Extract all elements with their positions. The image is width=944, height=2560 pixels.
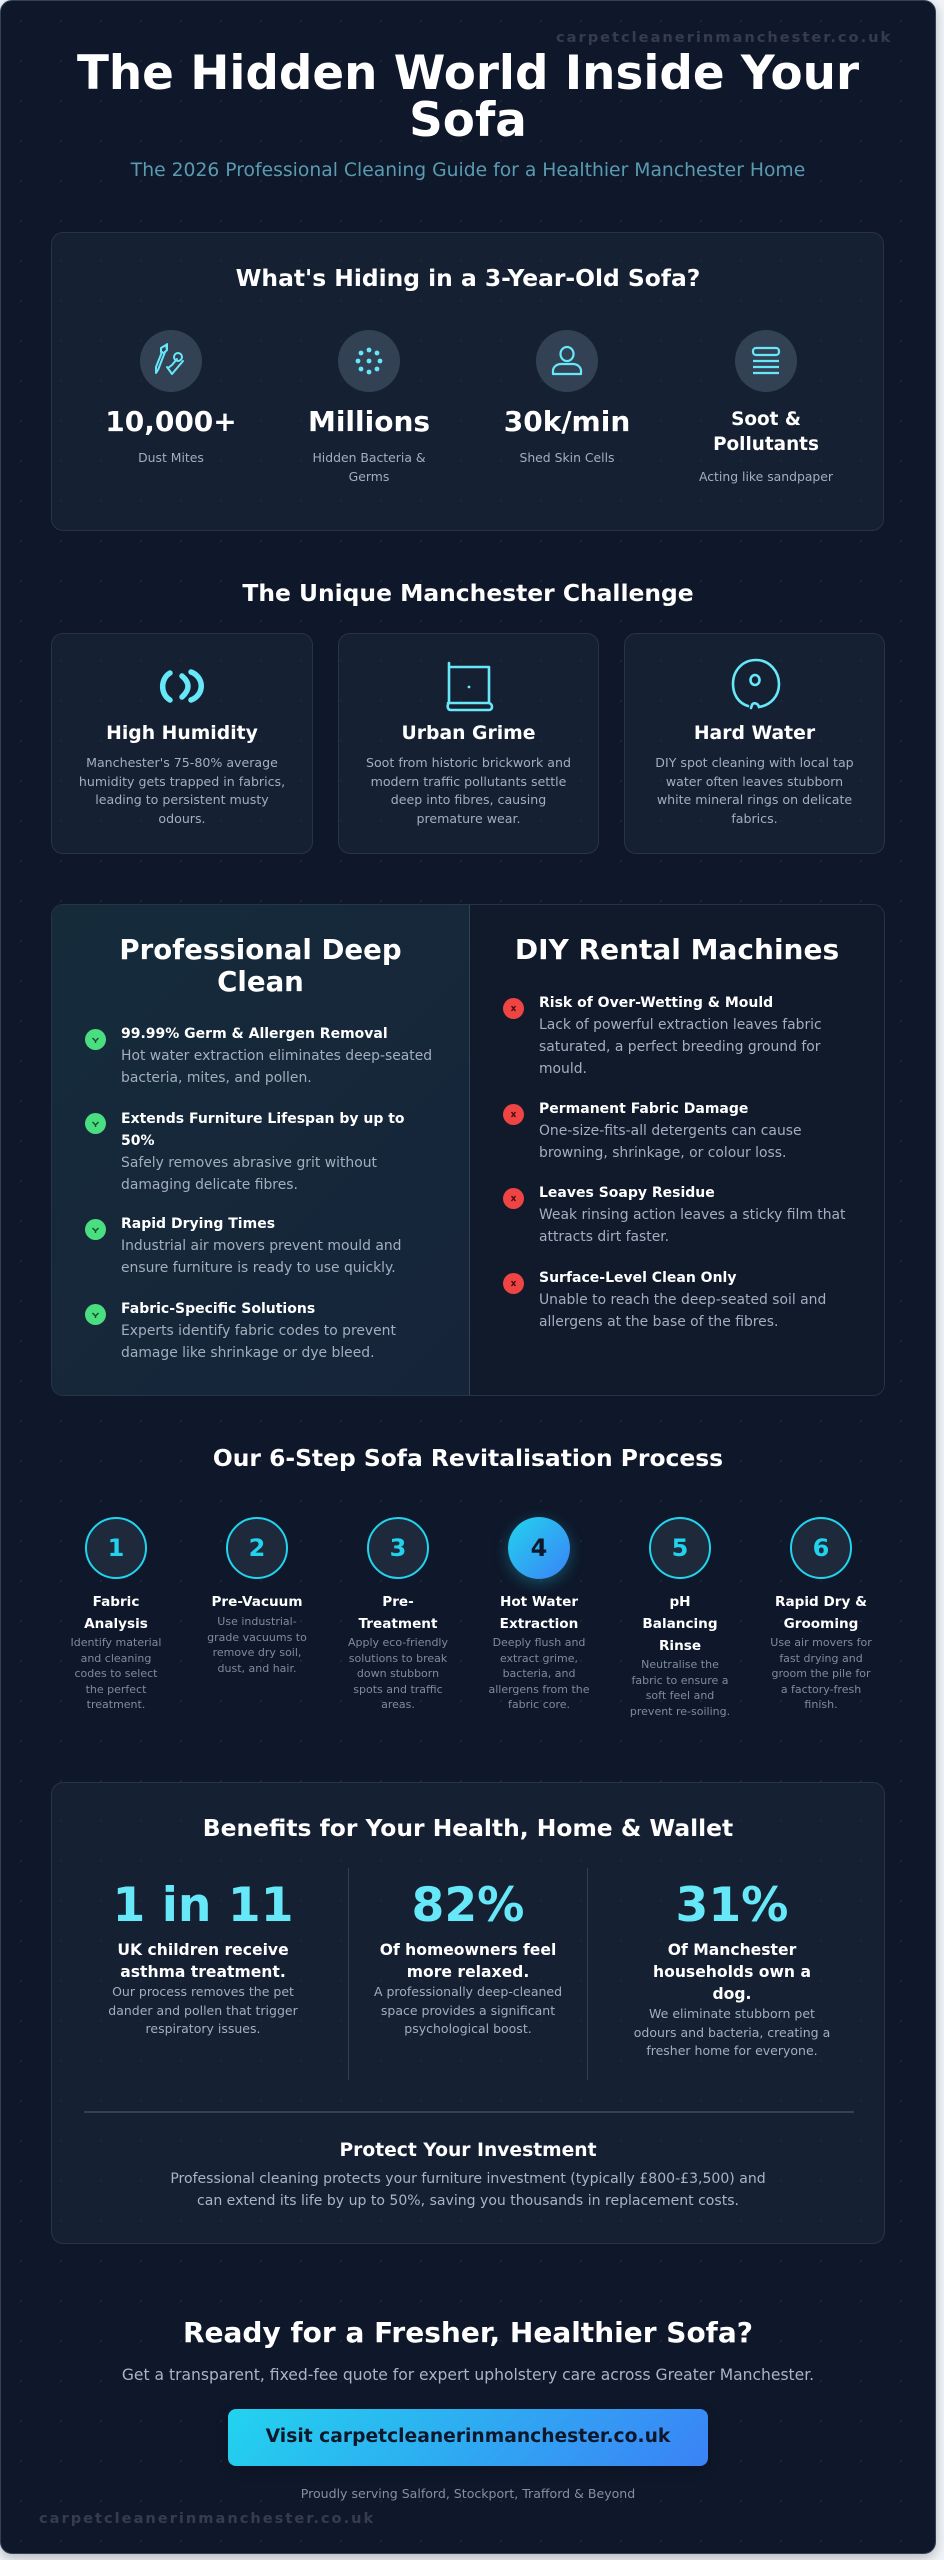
stat text: space provides a significant <box>381 2003 555 2018</box>
step title: Analysis <box>84 1616 148 1632</box>
step text: dust, and hair. <box>218 1662 296 1675</box>
icon: check <box>85 1113 106 1134</box>
stat text <box>83 1983 323 2039</box>
item text: Industrial air movers prevent mould and <box>121 1238 401 1254</box>
paragraph: Professional cleaning protects your furniture investment (typically £800-£3,500) and <box>170 2171 766 2187</box>
stat value: Pollutants <box>713 434 819 455</box>
item text: Hot water extraction eliminates deep-seated <box>121 1048 432 1064</box>
step title <box>46 1592 186 1636</box>
step number <box>649 1517 711 1579</box>
item: fabric-specific <box>85 1301 396 1361</box>
item title: Fabric-Specific Solutions <box>121 1301 315 1317</box>
item title: Extends Furniture Lifespan by up to <box>121 1111 405 1127</box>
step text: fast drying and <box>779 1652 863 1665</box>
step text: Apply eco-friendly <box>348 1636 448 1649</box>
panel: urban grime <box>338 633 599 854</box>
stat text: psychological boost. <box>404 2021 532 2036</box>
step text: and cleaning <box>81 1652 151 1665</box>
item text <box>121 1048 432 1086</box>
panel: high humidity <box>51 633 313 854</box>
step text: Use industrial- <box>217 1615 297 1628</box>
subtitle: The 2026 Professional Cleaning Guide for a Healthier Manchester Home <box>131 160 805 181</box>
item: soapy residue <box>503 1185 846 1245</box>
step title: Rinse <box>659 1638 701 1654</box>
stat text <box>348 1983 588 2039</box>
item text: Weak rinsing action leaves a sticky film that <box>539 1207 846 1223</box>
step text: prevent re-soiling. <box>630 1705 730 1718</box>
step text: bacteria, and <box>503 1667 575 1680</box>
card heading: Hard Water <box>694 723 815 744</box>
step number: 6 <box>813 1534 829 1562</box>
stat label: Hidden Bacteria & <box>312 450 426 465</box>
step title: Hot Water <box>500 1594 578 1610</box>
stat text: fresher home for everyone. <box>646 2043 818 2058</box>
step title: Balancing <box>642 1616 718 1632</box>
item text: mould. <box>539 1061 587 1077</box>
icon: humidity <box>160 669 204 703</box>
icon: layers <box>735 330 797 392</box>
card text: odours. <box>158 811 206 826</box>
heading: manchester challenge: The Unique Manchester Challenge <box>242 579 694 607</box>
stat heading <box>612 1940 852 2005</box>
step text: finish. <box>804 1698 838 1711</box>
watermark: top right: carpetcleanerinmanchester.co.uk <box>556 29 892 46</box>
step title <box>610 1592 750 1657</box>
column heading: Professional Deep <box>119 933 402 966</box>
paragraph: can extend its life by up to 50%, saving you thousands in replacement costs. <box>197 2193 739 2209</box>
step title: pH <box>669 1594 691 1610</box>
subheading: Protect Your Investment <box>339 2140 597 2161</box>
step title: Pre-Vacuum <box>211 1594 303 1610</box>
step title: Rapid Dry & <box>775 1594 867 1610</box>
item: surface clean <box>503 1267 873 1337</box>
step text: codes to select <box>74 1667 157 1680</box>
stat value: 30k/min <box>504 405 630 438</box>
item title: Risk of Over-Wetting & Mould <box>539 995 773 1011</box>
stat value: Soot & <box>731 409 801 430</box>
stat label <box>312 450 426 484</box>
big stat: 1 in 11 <box>112 1878 294 1933</box>
card text: premature wear. <box>416 811 520 826</box>
card text <box>655 755 854 826</box>
heading: benefits: Benefits for Your Health, Home & Wallet <box>203 1814 733 1842</box>
heading: process: Our 6-Step Sofa Revitalisation Process <box>213 1444 723 1472</box>
icon: person <box>536 330 598 392</box>
step text: remove dry soil, <box>213 1646 301 1659</box>
step title: Extraction <box>500 1616 578 1632</box>
item title: 99.99% Germ & Allergen Removal <box>121 1026 388 1042</box>
card heading: High Humidity <box>106 723 258 744</box>
stat label: Dust Mites <box>138 450 204 465</box>
stat text: Our process removes the pet <box>112 1984 294 1999</box>
icon: check <box>85 1219 106 1240</box>
step text: a factory-fresh <box>781 1683 861 1696</box>
card text: Soot from historic brickwork and <box>366 755 571 770</box>
icon: cross <box>503 1104 524 1125</box>
step number: 5 <box>672 1534 688 1562</box>
item text <box>121 1323 396 1361</box>
stat value: Millions <box>308 405 430 438</box>
item text: One-size-fits-all detergents can cause <box>539 1123 802 1139</box>
stat: skin cells <box>504 330 630 465</box>
step 3 <box>328 1517 468 1727</box>
title: The Hidden World Inside Your <box>77 47 859 101</box>
card text: Manchester's 75-80% average <box>86 755 278 770</box>
card text: water often leaves stubborn <box>666 774 843 789</box>
step number: 2 <box>249 1534 265 1562</box>
item text: Unable to reach the deep-seated soil and <box>539 1292 826 1308</box>
step text: the perfect <box>86 1683 146 1696</box>
stat text: We eliminate stubborn pet <box>649 2006 815 2021</box>
stat heading: dog. <box>713 1985 751 2003</box>
step text: extract grime, <box>500 1652 578 1665</box>
item text: damage like shrinkage or dye bleed. <box>121 1345 375 1361</box>
step 6 <box>751 1517 891 1727</box>
step 1 <box>46 1517 186 1727</box>
icon: urban grime <box>446 662 494 712</box>
panel: what's hiding <box>51 232 884 531</box>
step text: Neutralise the <box>641 1658 719 1671</box>
stat value: 10,000+ <box>105 405 237 438</box>
step text <box>46 1635 186 1713</box>
step number <box>367 1517 429 1579</box>
icon: hard water <box>732 658 780 710</box>
stat label: Acting like sandpaper <box>699 469 833 484</box>
step number: 3 <box>390 1534 406 1562</box>
item text: bacteria, mites, and pollen. <box>121 1070 312 1086</box>
step number <box>85 1517 147 1579</box>
panel: hard water <box>624 633 885 854</box>
card text <box>79 755 285 826</box>
watermark: bottom left: carpetcleanerinmanchester.co.uk <box>39 2510 375 2527</box>
icon: cross <box>503 1273 524 1294</box>
step text: areas. <box>381 1698 415 1711</box>
benefit: dog owners <box>612 1868 852 2078</box>
item title: Rapid Drying Times <box>121 1216 275 1232</box>
step 4 <box>469 1517 609 1727</box>
step number highlighted: 4 <box>531 1534 547 1562</box>
item text <box>539 1289 826 1333</box>
step text <box>610 1657 750 1719</box>
step text <box>469 1635 609 1713</box>
stat text: respiratory issues. <box>146 2021 260 2036</box>
item text <box>539 1123 802 1161</box>
stat heading: Of homeowners feel <box>380 1941 556 1959</box>
stat heading: more relaxed. <box>407 1963 529 1981</box>
step text: solutions to break <box>349 1652 447 1665</box>
icon: check <box>85 1304 106 1325</box>
card text: DIY spot cleaning with local tap <box>655 755 854 770</box>
card text: white mineral rings on delicate <box>657 792 852 807</box>
icon: dust mites <box>140 330 202 392</box>
item title: Leaves Soapy Residue <box>539 1185 715 1201</box>
button: Visit carpetcleanerinmanchester.co.uk <box>266 2426 670 2447</box>
step title: Pre- <box>382 1594 414 1610</box>
item title: 50% <box>121 1133 155 1149</box>
column: DIY rental machines <box>470 905 884 1395</box>
item text <box>121 1155 377 1193</box>
stat heading: asthma treatment. <box>120 1963 286 1981</box>
stat: soot and pollutants <box>699 330 833 484</box>
panel: benefits <box>51 1782 885 2244</box>
step text: treatment. <box>87 1698 145 1711</box>
item text: Safely removes abrasive grit without <box>121 1155 377 1171</box>
step number <box>226 1517 288 1579</box>
stat label: Germs <box>349 469 389 484</box>
icon: check <box>85 1029 106 1050</box>
paragraph <box>52 2168 884 2212</box>
step text: allergens from the <box>488 1683 590 1696</box>
icon: cross <box>503 1188 524 1209</box>
item text <box>539 1017 822 1077</box>
stat text: dander and pollen that trigger <box>108 2003 298 2018</box>
item text: Experts identify fabric codes to prevent <box>121 1323 396 1339</box>
step text <box>328 1635 468 1713</box>
step text: down stubborn <box>357 1667 439 1680</box>
step text: grade vacuums to <box>207 1631 307 1644</box>
item text: Lack of powerful extraction leaves fabric <box>539 1017 822 1033</box>
step text: fabric to ensure a <box>632 1674 728 1687</box>
card heading: Urban Grime <box>402 723 535 744</box>
item: drying <box>85 1216 401 1276</box>
step number highlighted <box>508 1517 570 1579</box>
icon: cross <box>503 998 524 1019</box>
call to action heading: Ready for a Fresher, Healthier Sofa? <box>183 2316 753 2349</box>
stat text: odours and bacteria, creating a <box>634 2025 830 2040</box>
step title: Fabric <box>93 1594 139 1610</box>
stat: bacteria <box>308 330 430 484</box>
step text: Identify material <box>71 1636 161 1649</box>
card text: modern traffic pollutants settle <box>371 774 566 789</box>
footer note: Proudly serving Salford, Stockport, Trafford & Beyond <box>301 2486 635 2501</box>
item text <box>121 1238 401 1276</box>
step text <box>187 1614 327 1676</box>
step text: spots and traffic <box>353 1683 443 1696</box>
step text: Deeply flush and <box>493 1636 585 1649</box>
step title: Grooming <box>784 1616 858 1632</box>
heading: what's hiding: What's Hiding in a 3-Year-Old Sofa? <box>236 264 700 292</box>
item text: damaging delicate fibres. <box>121 1177 298 1193</box>
item: over-wetting <box>503 995 822 1077</box>
stat label: Shed Skin Cells <box>519 450 615 465</box>
step 2 <box>187 1517 327 1727</box>
big stat: 82% <box>412 1878 524 1933</box>
card text <box>366 755 571 826</box>
item text: saturated, a perfect breeding ground for <box>539 1039 820 1055</box>
item text: attracts dirt faster. <box>539 1229 669 1245</box>
item text: ensure furniture is ready to use quickly. <box>121 1260 396 1276</box>
item text: allergens at the base of the fibres. <box>539 1314 778 1330</box>
stat heading: Of Manchester <box>668 1941 796 1959</box>
step text: Use air movers for <box>770 1636 872 1649</box>
item: fabric damage <box>503 1101 802 1161</box>
benefit: relaxed <box>348 1868 588 2078</box>
card text: deep into fibres, causing <box>391 792 546 807</box>
step title <box>469 1592 609 1636</box>
protect your investment <box>52 2135 884 2225</box>
item: germ removal <box>85 1026 432 1086</box>
item title: Permanent Fabric Damage <box>539 1101 748 1117</box>
stat heading: UK children receive <box>117 1941 289 1959</box>
item title <box>121 1111 405 1149</box>
card text: leading to persistent musty <box>95 792 269 807</box>
card text: humidity gets trapped in fabrics, <box>79 774 285 789</box>
step number: 1 <box>108 1534 124 1562</box>
big stat: 31% <box>676 1878 788 1933</box>
card text: fabrics. <box>731 811 778 826</box>
button <box>228 2409 708 2466</box>
item text: browning, shrinkage, or colour loss. <box>539 1145 786 1161</box>
step title <box>751 1592 891 1636</box>
title <box>77 47 859 148</box>
step number <box>790 1517 852 1579</box>
stat value <box>713 409 819 455</box>
column heading <box>119 933 402 998</box>
step text: fabric core. <box>508 1698 570 1711</box>
process steps <box>46 1517 896 1737</box>
step text: groom the pile for <box>772 1667 870 1680</box>
item text <box>539 1207 846 1245</box>
icon: bacteria dots <box>338 330 400 392</box>
item title: Surface-Level Clean Only <box>539 1270 736 1286</box>
stat text <box>612 2005 852 2061</box>
column: professional deep clean <box>52 905 470 1395</box>
stat heading: households own a <box>653 1963 811 1981</box>
title: Sofa <box>409 94 527 148</box>
step text <box>751 1635 891 1713</box>
step text: soft feel and <box>646 1689 714 1702</box>
panel: comparison <box>51 904 885 1396</box>
stat text: A professionally deep-cleaned <box>374 1984 562 1999</box>
step title: Treatment <box>359 1616 437 1632</box>
stat heading <box>348 1940 588 1984</box>
stat heading <box>83 1940 323 1984</box>
stat: dust mites <box>105 330 237 465</box>
step title <box>328 1592 468 1636</box>
column heading: Clean <box>217 965 304 998</box>
item: lifespan <box>85 1111 405 1193</box>
benefit: asthma <box>83 1868 323 2078</box>
column heading: DIY Rental Machines <box>515 933 839 966</box>
step 5 <box>610 1517 750 1727</box>
call to action text: Get a transparent, fixed-fee quote for expert upholstery care across Greater Manchester. <box>122 2366 814 2384</box>
